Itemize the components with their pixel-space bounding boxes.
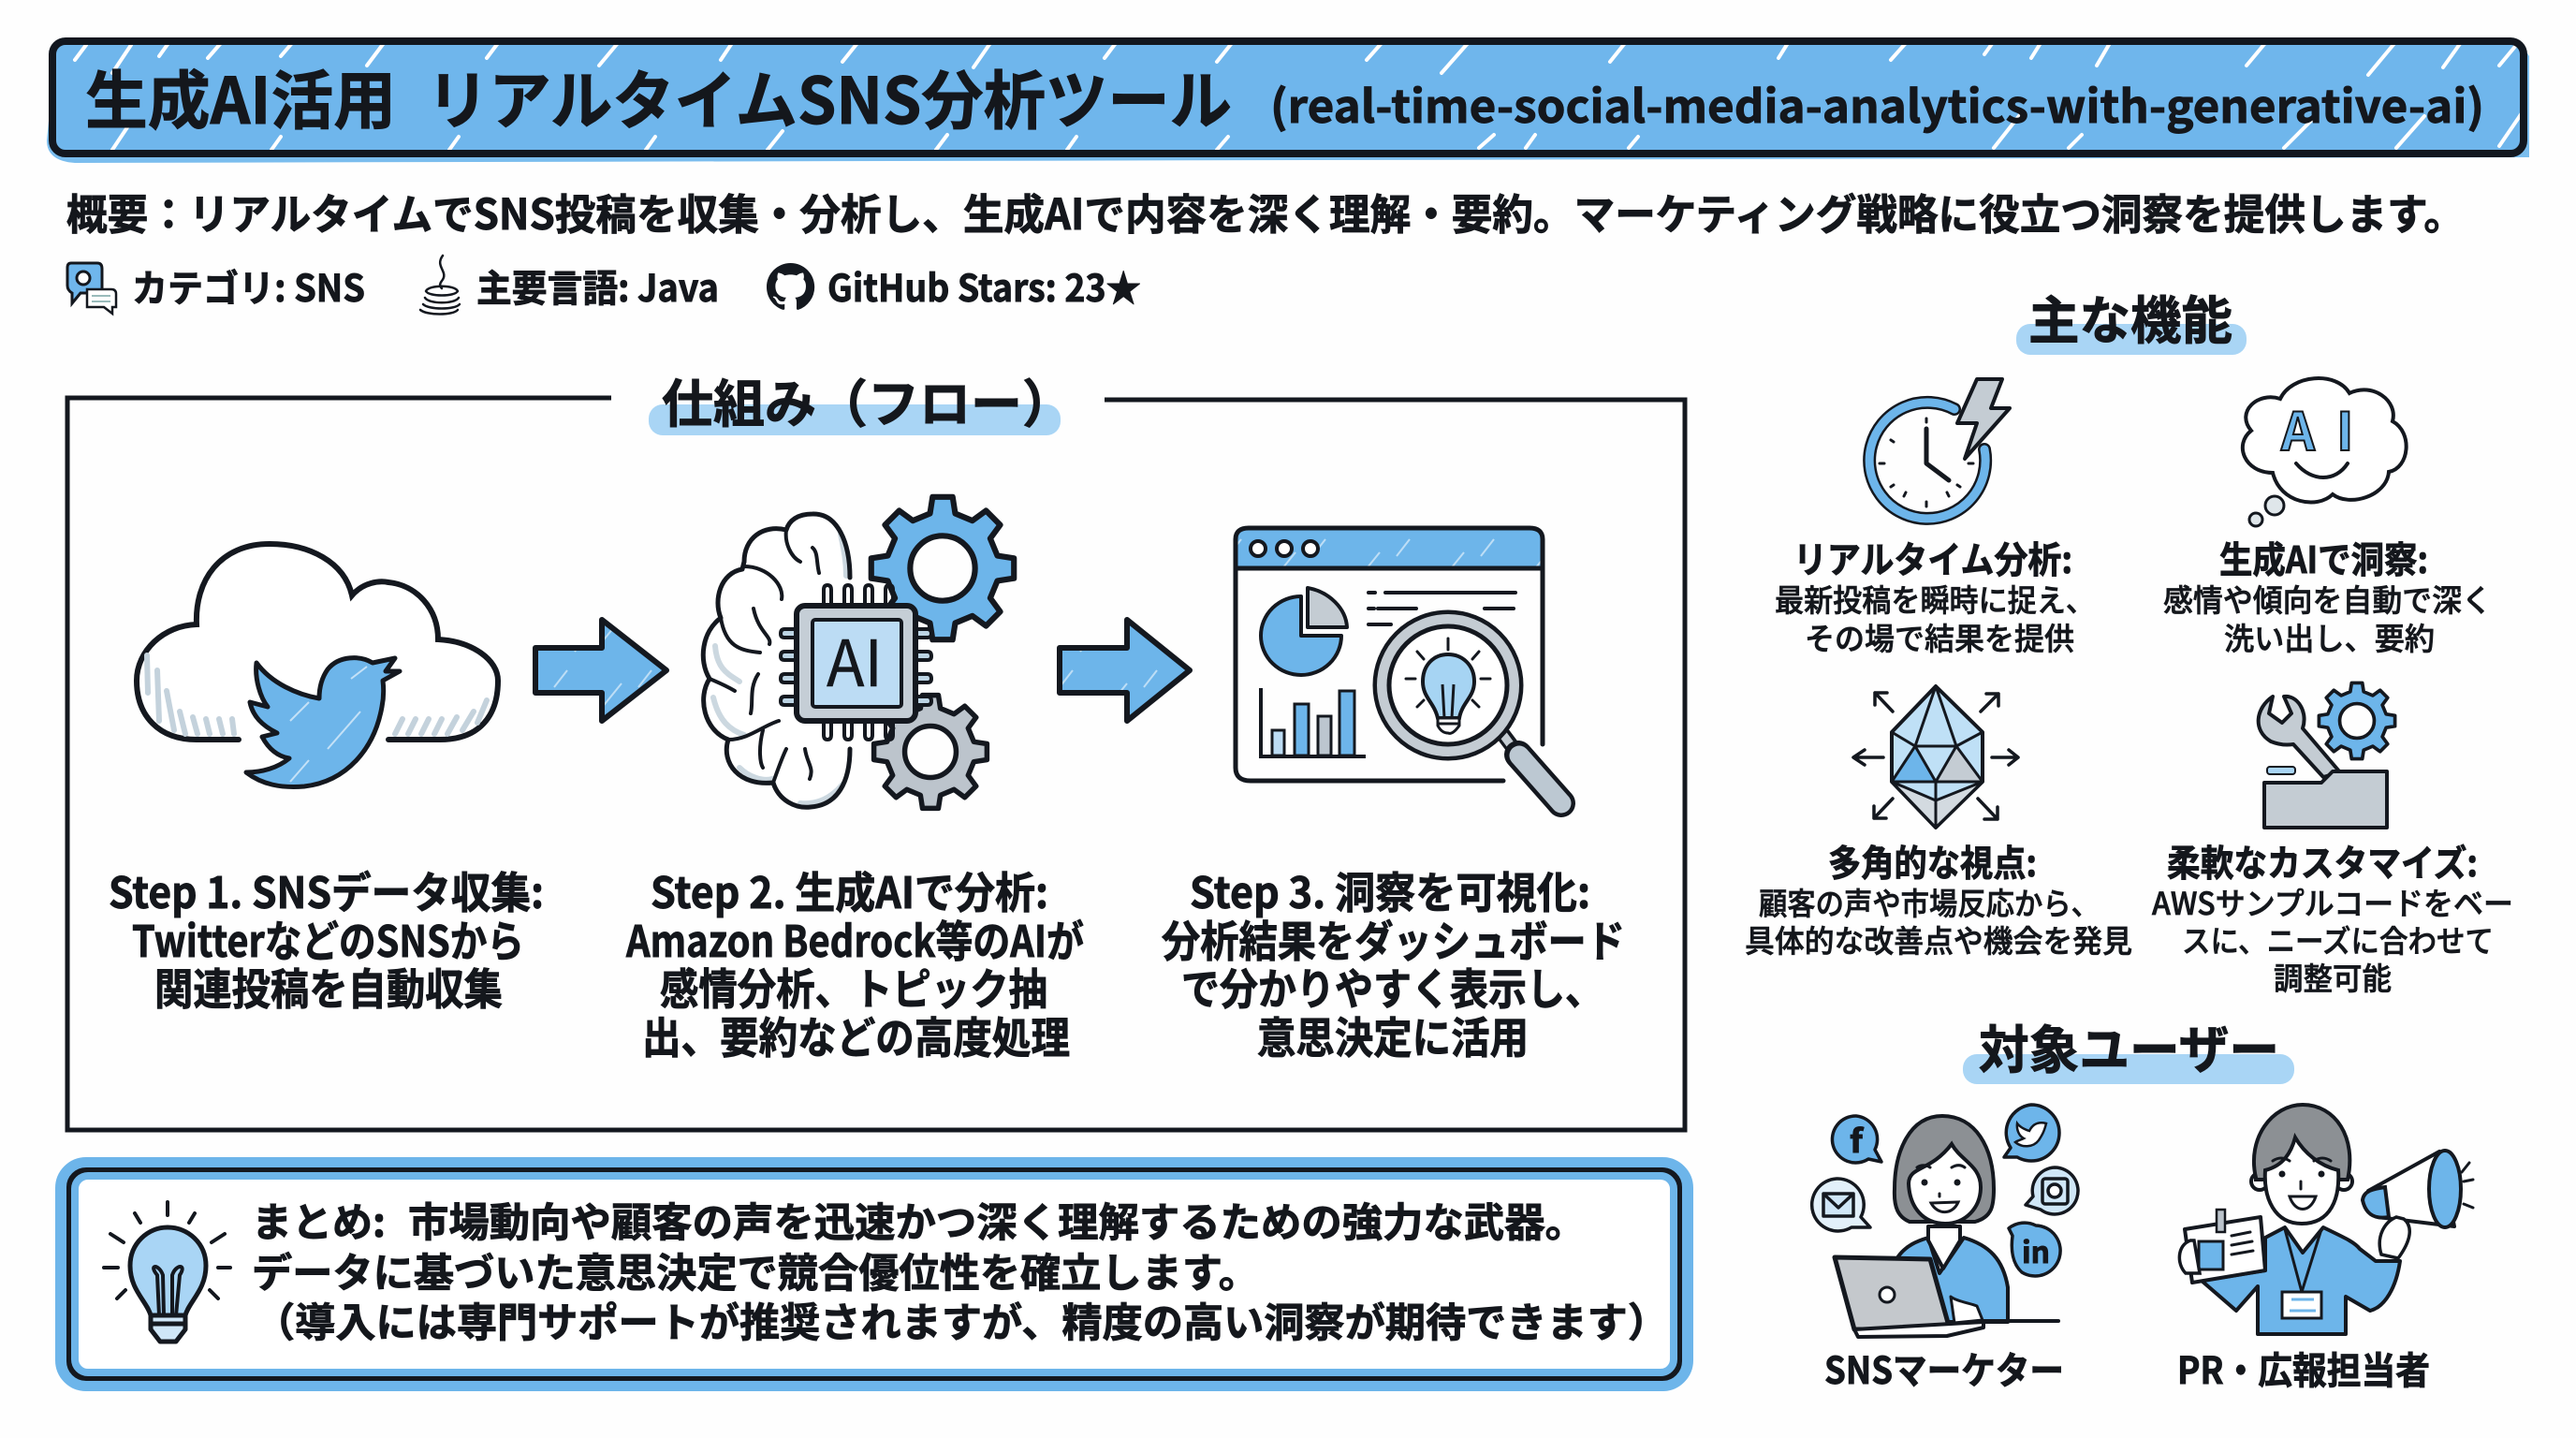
id card xyxy=(2179,1210,2265,1283)
name badge xyxy=(2282,1292,2321,1318)
browser window xyxy=(1236,528,1543,781)
panel: flow xyxy=(67,362,1685,1130)
man body xyxy=(2202,1227,2400,1334)
step 2 text: 出、要約などの高度処理 xyxy=(642,1005,1070,1066)
panel: target users xyxy=(1812,1008,2473,1395)
features heading: 主な機能 xyxy=(2028,279,2232,354)
summary text: 市場動向や顧客の声を迅速かつ深く理解するための強力な武器。 xyxy=(408,1191,1586,1249)
arrow 2 xyxy=(1060,620,1190,721)
category label: カテゴリ: SNS xyxy=(132,258,365,313)
step 1 text: TwitterなどのSNSから xyxy=(132,908,524,970)
users heading: 対象ユーザー xyxy=(1979,1008,2279,1083)
overview text: 概要：リアルタイムでSNS投稿を収集・分析し、生成AIで内容を深く理解・要約。マーケティング戦略に役立つ洞察を提供します。 xyxy=(66,181,2465,242)
step 2 text: Amazon Bedrock等のAIが xyxy=(625,908,1084,970)
title text: 生成AI活用 xyxy=(85,50,396,142)
step 2 text: 感情分析、トピック抽 xyxy=(660,956,1047,1018)
summary text: まとめ: xyxy=(252,1191,386,1249)
pie chart xyxy=(1261,588,1347,675)
feature: flexible customization xyxy=(2152,682,2513,999)
feature: generative AI insight: 感情や傾向を自動で深く xyxy=(2163,576,2492,621)
text lines xyxy=(1368,593,1515,624)
feature: multi-angle view xyxy=(1745,686,2132,961)
brain outline xyxy=(703,514,850,807)
icon: AI thought cloud: I xyxy=(2336,390,2353,466)
language label: 主要言語: Java xyxy=(476,258,719,313)
user: PR officer xyxy=(2177,1105,2473,1395)
feature: generative AI insight: 洗い出し、要約 xyxy=(2224,614,2435,659)
feature: multi-angle view: 顧客の声や市場反応から、 xyxy=(1759,879,2100,924)
feature: generative AI insight: 生成AIで洞察: xyxy=(2219,532,2428,584)
woman body xyxy=(1896,1238,2008,1322)
icon: AI brain with gears xyxy=(703,497,1014,808)
metadata row xyxy=(67,256,1141,315)
feature: realtime analysis: 最新投稿を瞬時に捉え、 xyxy=(1775,576,2095,621)
title banner xyxy=(47,41,2529,163)
chip label: AI xyxy=(827,612,883,705)
user: SNS marketer: SNSマーケター xyxy=(1824,1341,2064,1395)
step 3 text: 意思決定に活用 xyxy=(1257,1005,1529,1066)
man head xyxy=(2251,1105,2352,1224)
title text: リアルタイムSNS分析ツール xyxy=(427,50,1232,142)
feature: multi-angle view: 多角的な視点: xyxy=(1828,835,2037,888)
summary text: （導入には専門サポートが推奨されますが、精度の高い洞察が期待できます） xyxy=(255,1291,1668,1349)
user: SNS marketer: f xyxy=(1850,1116,1864,1162)
step 1 text: Step 1. SNSデータ収集: xyxy=(109,859,544,921)
feature: flexible customization: 柔軟なカスタマイズ: xyxy=(2167,835,2478,888)
summary text xyxy=(252,1191,1668,1349)
step 3 text: Step 3. 洞察を可視化: xyxy=(1190,859,1590,921)
step 1 text: 関連投稿を自動収集 xyxy=(154,956,503,1018)
repository name: (real-time-social-media-analytics-with-generative-ai) xyxy=(1270,70,2484,136)
icon: github xyxy=(767,263,814,310)
feature: flexible customization: 調整可能 xyxy=(2274,954,2392,999)
arrow 1 xyxy=(535,620,666,721)
feature: realtime analysis: リアルタイム分析: xyxy=(1793,532,2072,584)
laptop xyxy=(1835,1257,1950,1329)
icon: AI thought cloud xyxy=(2243,378,2407,526)
step 1 text xyxy=(109,859,544,1018)
icon: AI thought cloud: A xyxy=(2280,390,2316,466)
icon: twitter bird xyxy=(246,658,400,786)
title text xyxy=(85,50,1232,142)
icon: light bulb xyxy=(104,1202,230,1342)
feature: flexible customization: スに、ニーズに合わせて xyxy=(2182,917,2494,961)
step 2 text xyxy=(625,859,1084,1066)
woman hair xyxy=(1895,1116,1994,1222)
feature: multi-angle view: 具体的な改善点や機会を発見 xyxy=(1745,917,2132,961)
step 3 text xyxy=(1162,859,1625,1066)
grey gear xyxy=(874,696,987,808)
magnifier xyxy=(1375,612,1561,803)
step 3 text: 分析結果をダッシュボード xyxy=(1162,908,1625,970)
icon: gem with arrows xyxy=(1853,686,2018,828)
feature: flexible customization: AWSサンプルコードをベー xyxy=(2152,879,2513,924)
flow heading: 仕組み（フロー） xyxy=(662,362,1074,437)
icon: java cup xyxy=(420,256,460,315)
panel: main features xyxy=(1745,279,2513,999)
github stars label: GitHub Stars: 23★ xyxy=(827,258,1141,313)
icon: wrench gear folder xyxy=(2259,682,2395,828)
icon: cloud with twitter bird xyxy=(137,544,498,786)
social bubbles xyxy=(1812,1105,2078,1276)
woman face xyxy=(1909,1144,1981,1224)
panel: summary xyxy=(62,1164,1687,1385)
summary text: データに基づいた意思決定で競合優位性を確立します。 xyxy=(252,1241,1259,1299)
blue gear xyxy=(871,497,1014,639)
icon: dashboard with magnifier xyxy=(1236,528,1561,803)
user: PR officer: PR・広報担当者 xyxy=(2177,1341,2430,1395)
feature: realtime analysis: その場で結果を提供 xyxy=(1805,614,2074,659)
user: SNS marketer: in xyxy=(2022,1229,2050,1271)
step 3 text: で分かりやすく表示し、 xyxy=(1181,956,1603,1018)
AI chip xyxy=(781,585,931,740)
megaphone xyxy=(2363,1151,2473,1258)
bar chart xyxy=(1261,688,1366,756)
feature: generative AI insight xyxy=(2163,378,2492,659)
feature: realtime analysis xyxy=(1775,379,2095,659)
user: SNS marketer xyxy=(1812,1105,2078,1395)
icon: clock with lightning xyxy=(1869,379,2010,519)
icon: chat bubbles xyxy=(67,263,116,314)
step 2 text: Step 2. 生成AIで分析: xyxy=(651,859,1048,921)
